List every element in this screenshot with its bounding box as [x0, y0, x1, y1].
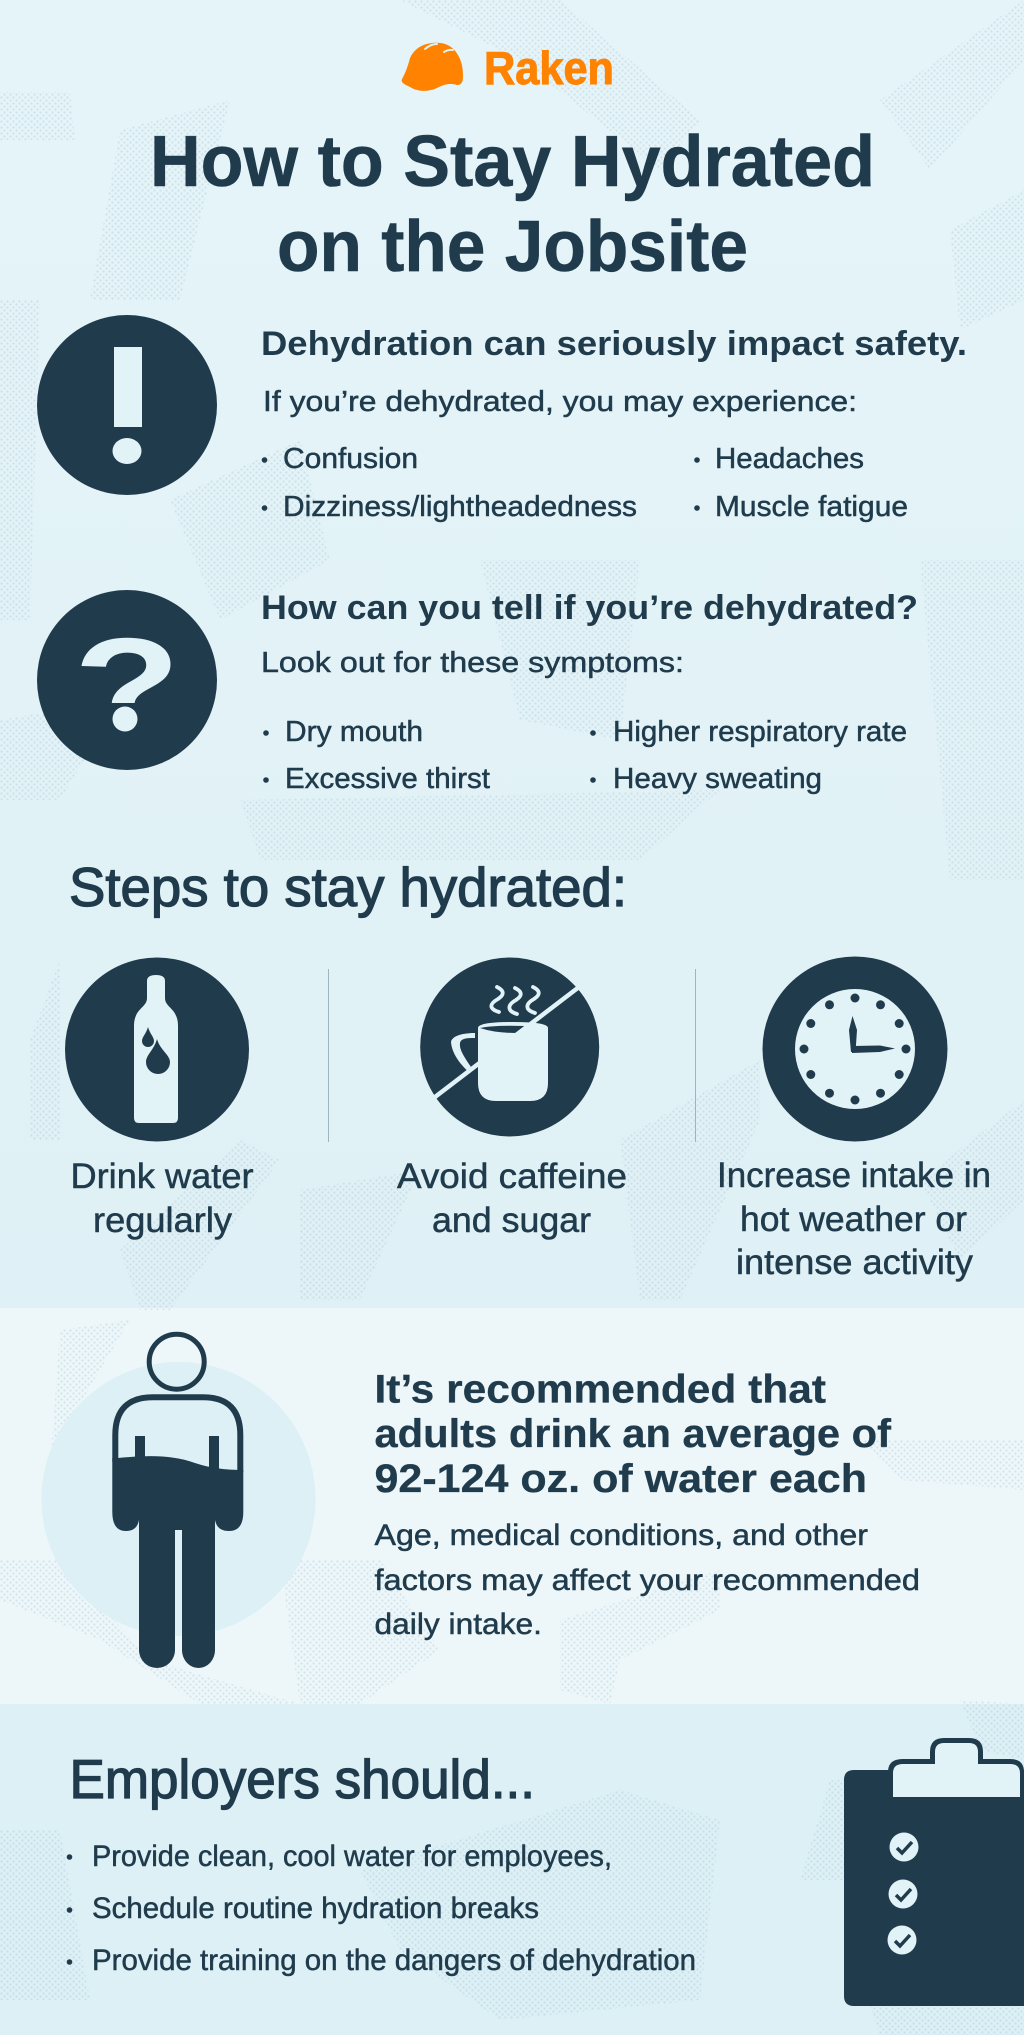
list: symptoms: Higher respiratory rate [613, 716, 907, 748]
panel: dehydration symptoms [37, 589, 918, 795]
list: effects: Confusion [283, 443, 418, 475]
body text: intake factors: factors may affect your recommended [374, 1564, 920, 1597]
logo wordmark: Raken [484, 42, 614, 94]
heading: recommended intake [374, 1368, 892, 1501]
list: symptoms: Dry mouth [285, 716, 423, 748]
icon: exclamation mark [37, 315, 217, 495]
list: effects: Headaches [715, 443, 864, 475]
list: employer actions: Provide clean, cool water for employees, [92, 1840, 612, 1873]
panel: step avoid caffeine [397, 958, 627, 1240]
panel: dehydration impact [37, 315, 967, 523]
list: employer actions [67, 1840, 696, 1977]
icon: orange hard hat [402, 43, 463, 91]
icon: question mark: ? [73, 610, 181, 761]
list: effects [262, 443, 908, 523]
heading: employers: Employers should... [70, 1748, 535, 1810]
list: employer actions: Schedule routine hydration breaks [92, 1892, 539, 1925]
panel: step increase intake [717, 956, 991, 1282]
list: employer actions: Provide training on the dangers of dehydration [92, 1944, 696, 1977]
heading: symptoms: How can you tell if you’re dehydrated? [261, 589, 918, 627]
title: How to Stay Hydrated [150, 122, 875, 202]
panel: employers band [0, 1704, 1024, 2035]
list: symptoms: Heavy sweating [613, 763, 822, 795]
list: symptoms [263, 716, 907, 795]
icon: question mark [37, 590, 217, 770]
icon: water bottle [65, 958, 249, 1142]
label: drink water: regularly [93, 1201, 233, 1240]
heading: recommended intake: 92-124 oz. of water each [374, 1457, 867, 1501]
label: increase intake: intense activity [736, 1243, 974, 1282]
body text: intake factors: daily intake. [374, 1608, 542, 1641]
body text: intake factors: Age, medical conditions, and other [374, 1519, 868, 1552]
label: increase intake: hot weather or [740, 1200, 967, 1239]
intro text: experience: If you’re dehydrated, you may experience: [263, 386, 857, 418]
list: symptoms: Excessive thirst [285, 763, 490, 795]
panel: step drink water [65, 958, 254, 1240]
label: drink water: Drink water [70, 1157, 254, 1196]
label: avoid caffeine: Avoid caffeine [397, 1157, 627, 1196]
label: avoid caffeine: and sugar [432, 1201, 591, 1240]
panel: employers [67, 1738, 1024, 2006]
panel: water recommendation [42, 1334, 920, 1668]
title [150, 122, 875, 287]
heading: steps: Steps to stay hydrated: [69, 856, 627, 918]
label: drink water [70, 1157, 254, 1240]
icon: person filled with water [42, 1334, 316, 1668]
panel: recommendation band [0, 1308, 1024, 1704]
logo: Raken [402, 42, 614, 94]
list: effects: Dizziness/lightheadedness [283, 491, 637, 523]
list: effects: Muscle fatigue [715, 491, 908, 523]
title: on the Jobsite [277, 207, 748, 287]
icon: clipboard checklist [844, 1738, 1024, 2006]
icon: clock [762, 956, 948, 1142]
icon: crossed coffee mug [420, 958, 599, 1136]
heading: impact: Dehydration can seriously impact safety. [261, 325, 967, 363]
body text: intake factors [374, 1519, 920, 1641]
heading: recommended intake: It’s recommended that [374, 1368, 826, 1412]
label: increase intake [717, 1156, 991, 1282]
heading: recommended intake: adults drink an average of [374, 1412, 892, 1456]
label: increase intake: Increase intake in [717, 1156, 991, 1195]
label: avoid caffeine [397, 1157, 627, 1240]
background panel [0, 0, 1024, 1308]
intro text: symptoms: Look out for these symptoms: [261, 647, 684, 679]
